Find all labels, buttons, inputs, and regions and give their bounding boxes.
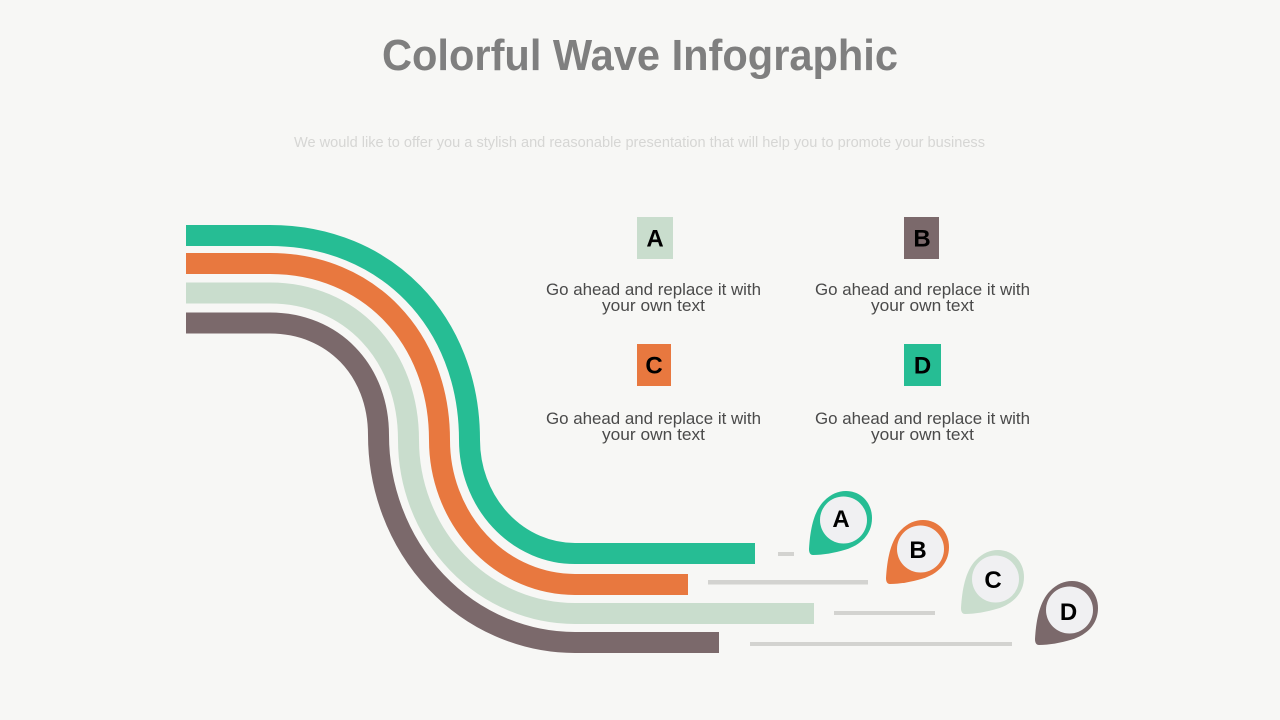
legend letter A: A	[646, 226, 664, 252]
pin disc B	[897, 526, 944, 572]
legend text D: your own text	[871, 426, 974, 444]
legend item B	[815, 217, 1030, 315]
band: orange wave	[186, 264, 688, 584]
band: brown wave	[186, 323, 719, 642]
band: green wave	[186, 236, 755, 554]
connector B	[708, 580, 868, 584]
legend text D: Go ahead and replace it with	[815, 410, 1030, 428]
legend swatch C	[637, 344, 671, 386]
title: Colorful Wave Infographic	[382, 31, 898, 80]
legend letter D: D	[914, 352, 931, 380]
legend letter B: B	[913, 226, 931, 252]
legend item C	[546, 344, 761, 444]
pin letter C: C	[984, 567, 1002, 594]
pin disc C	[972, 556, 1019, 602]
pin letter A: A	[832, 506, 850, 533]
connector C	[834, 611, 935, 615]
pin A	[809, 491, 872, 555]
legend item D	[815, 344, 1030, 444]
legend text A: Go ahead and replace it with	[546, 281, 761, 299]
pin C	[961, 550, 1024, 614]
legend swatch D	[904, 344, 941, 386]
pin shape B	[886, 520, 949, 584]
wave bands	[186, 236, 814, 642]
pin disc A	[820, 496, 867, 544]
legend text C: Go ahead and replace it with	[546, 410, 761, 428]
legend text B: your own text	[871, 297, 974, 315]
band: mint wave	[186, 293, 814, 614]
legend swatch A	[637, 217, 673, 259]
pin shape A	[809, 491, 872, 555]
connector A	[778, 552, 794, 556]
pin letter B: B	[909, 537, 927, 564]
pin disc D	[1046, 586, 1093, 634]
pin shape C	[961, 550, 1024, 614]
legend text C: your own text	[602, 426, 705, 444]
pin shape D	[1035, 581, 1098, 645]
connector D	[750, 642, 1012, 646]
legend text A: your own text	[602, 297, 705, 315]
pin letter D: D	[1060, 599, 1077, 626]
grey connector lines	[708, 552, 1012, 646]
legend item A	[546, 217, 761, 315]
pin D	[1035, 581, 1098, 645]
legend letter C: C	[645, 352, 663, 380]
pin B	[886, 520, 949, 584]
legend swatch B	[904, 217, 939, 259]
subtitle: We would like to offer you a stylish and reasonable presentation that will help you to promote your business	[294, 135, 985, 151]
legend text B: Go ahead and replace it with	[815, 281, 1030, 299]
